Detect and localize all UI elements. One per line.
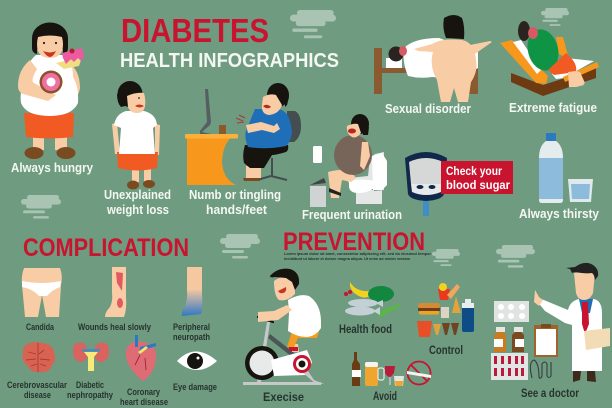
cerebrovascular disease: disease <box>24 390 51 400</box>
cerebrovascular disease: Cerebrovascular <box>7 380 67 390</box>
label: Control <box>429 343 463 357</box>
icon: junk food <box>417 283 474 337</box>
icon: thin woman <box>112 81 160 190</box>
icon: woman on toilet <box>310 114 387 207</box>
title <box>120 12 339 72</box>
symptom: extreme fatigue <box>500 21 599 115</box>
heading: PREVENTION <box>283 228 425 256</box>
candida <box>22 268 62 332</box>
symptom: always hungry <box>11 22 93 175</box>
icon: desk with monitor <box>185 89 238 185</box>
title: HEALTH INFOGRAPHICS <box>120 50 339 72</box>
icon: alcohol and cigarette <box>352 352 431 386</box>
coronary heart disease: heart disease <box>120 397 168 407</box>
label: Avoid <box>373 389 397 403</box>
panel: prevention <box>243 228 610 404</box>
icon: hungry woman <box>18 22 84 159</box>
red label <box>441 161 513 194</box>
icon: water bottle and glass <box>539 133 593 203</box>
icon: woman on sofa <box>500 21 599 96</box>
cerebrovascular disease <box>7 342 67 400</box>
heading: COMPLICATION <box>23 234 189 262</box>
peripheral neuropathy: neuropath <box>173 332 210 342</box>
candida: Candida <box>26 322 55 332</box>
label: hands/feet <box>206 203 268 217</box>
label: See a doctor <box>521 386 579 400</box>
lorem text: Lorem ipsum dolor sit amet, consectetur adipiscing elit, sed do eiusmod tempor <box>284 252 432 256</box>
peripheral neuropathy <box>173 267 210 342</box>
icon: blood glucose meter <box>405 152 447 216</box>
see a doctor <box>491 263 610 400</box>
wounds heal slowly <box>78 267 151 332</box>
lorem text: incididunt ut labore et dolore magna aliqua. Ut enim ad minim veniam <box>284 257 410 261</box>
exercise <box>243 269 324 404</box>
icon: cycling man <box>258 269 321 347</box>
label: Unexplained <box>104 188 171 202</box>
label: Always thirsty <box>519 207 599 221</box>
coronary heart disease <box>120 335 168 407</box>
label: Sexual disorder <box>385 102 471 116</box>
red label: Check your <box>446 166 502 178</box>
control <box>417 283 474 357</box>
symptom: always thirsty <box>519 133 599 221</box>
icon: woman at desk <box>236 83 301 181</box>
callout: check your blood sugar <box>405 152 513 216</box>
label: Frequent urination <box>302 208 402 222</box>
red label: blood sugar <box>446 180 511 192</box>
diabetic nephropathy: nephropathy <box>67 390 113 400</box>
label: Health food <box>339 322 392 336</box>
title: DIABETES <box>121 12 269 49</box>
panel: complication <box>7 234 217 407</box>
label <box>104 188 171 217</box>
icon: bed with couple <box>374 15 492 102</box>
icon: exercise bike <box>243 317 324 385</box>
symptom: unexplained weight loss <box>104 81 171 217</box>
label: Numb or tingling <box>189 188 281 202</box>
label: Always hungry <box>11 161 93 175</box>
decorative smoke clouds <box>21 8 569 268</box>
health food <box>339 282 401 336</box>
wounds heal slowly: Wounds heal slowly <box>78 322 151 332</box>
label <box>189 188 281 217</box>
symptom: frequent urination <box>302 114 402 222</box>
symptom: numb hands and feet <box>185 83 301 217</box>
avoid <box>352 352 431 403</box>
peripheral neuropathy: Peripheral <box>173 322 210 332</box>
coronary heart disease: Coronary <box>127 387 160 397</box>
label: Extreme fatigue <box>509 101 597 115</box>
label: Execise <box>263 390 304 404</box>
eye damage: Eye damage <box>173 382 217 392</box>
label: weight loss <box>106 203 169 217</box>
diabetic nephropathy: Diabetic <box>76 380 104 390</box>
lorem text <box>284 252 432 261</box>
diabetic nephropathy <box>67 343 113 400</box>
icon: fish and vegetables <box>344 282 401 318</box>
eye damage <box>173 352 217 392</box>
icon: doctor <box>534 263 610 382</box>
symptom: sexual disorder <box>374 15 492 116</box>
icon: medicine set <box>491 301 558 380</box>
